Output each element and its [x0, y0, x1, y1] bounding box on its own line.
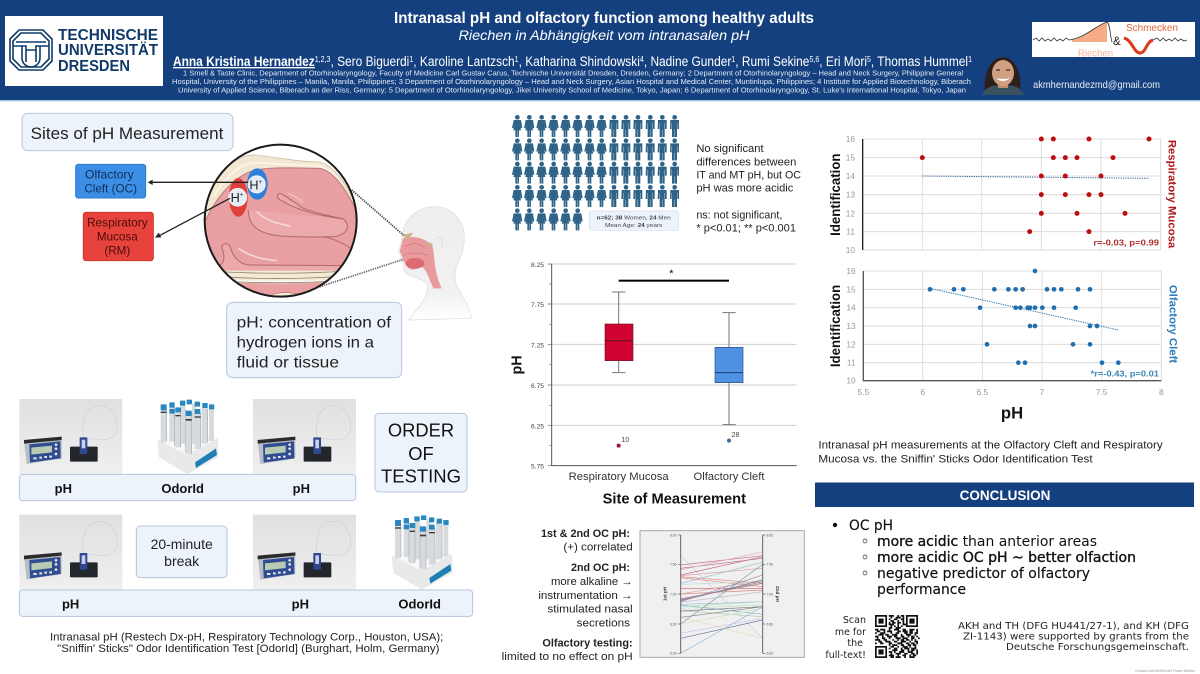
chart: olfactory cleft scatter [818, 266, 1178, 465]
conclusion bullets: more acidic than anterior areas [877, 534, 1097, 550]
authors: 1,2,3 [315, 55, 331, 64]
sequence bar 2: pH [292, 596, 309, 611]
email: akmhernandezmd@gmail.com [1033, 79, 1160, 91]
caption: scatter plots [818, 439, 1163, 465]
chart: olfactory cleft scatter: 6 [920, 387, 925, 397]
box: respiratory mucosa [605, 292, 633, 448]
significance bar [619, 268, 729, 282]
callout: order of testing: OF [408, 443, 434, 464]
text: scan me: full-text! [825, 650, 866, 661]
sequence bar 1: pH [293, 481, 310, 496]
chart: olfactory cleft scatter: Identification [828, 285, 843, 367]
chart: 1st vs 2nd OC pH slope graph: 7.00 [767, 592, 773, 596]
text: funding [958, 621, 1189, 653]
logo: Riechen & Schmecken: & [1113, 36, 1121, 48]
text: funding: AKH and TH (DFG HU441/27-1), and KH (DFG [958, 621, 1189, 632]
text: scan me: the [847, 638, 863, 649]
chart: pH box plot [510, 262, 797, 508]
axis labels: Olfactory Cleft [693, 471, 765, 483]
callout: 20-minute break: 20-minute [151, 536, 213, 552]
text: repeated pH notes: 2nd OC pH: [571, 562, 630, 574]
arrow: to respiratory mucosa label [155, 198, 230, 238]
authors: 1 [409, 55, 414, 64]
sequence bar 1: OdorId [161, 481, 204, 496]
axis labels: pH [510, 355, 526, 375]
caption: scatter plots: Intranasal pH measurements at the Olfactory Cleft and Respiratory [818, 439, 1163, 451]
conclusion bullets: more acidic OC pH ~ better olfaction [877, 550, 1136, 566]
text: pH differences: * p<0.01; ** p<0.001 [696, 222, 796, 234]
chart: olfactory cleft scatter: 6.5 [977, 387, 988, 397]
text: pH differences: differences between [696, 156, 796, 168]
caption: methods: "Sniffin' Sticks" Odor Identification Test [OdorId] (Burghart, Holm, Germany) [57, 643, 440, 655]
sequence bar 1 [19, 474, 356, 501]
affiliations: Hospital, University of the Philippines – Manila, Manila, Philippines; 3 Department of Otorhinolaryngology – Head and Neck Surgery, Asian Hospital and Medical Center, Muntinlupa, Philippines; 4 Institute for Applied Biotechnology, Biberach [172, 77, 971, 86]
callout: 20-minute break: break [164, 553, 200, 569]
text: repeated pH notes: more alkaline → [551, 576, 633, 588]
label: respiratory mucosa: Mucosa [97, 231, 138, 244]
affiliations: 1 Smell & Taste Clinic, Department of Otorhinolaryngology, Faculty of Medicine Carl Gustav Carus, Technische Universität Dresden, Dresden, Germany; 2 Department of Otorhinolaryngology – Head and Neck Surgery, Philippine General [183, 68, 963, 78]
y-axis ticks: 7.75 [531, 302, 544, 309]
label: olfactory cleft: Cleft (OC) [84, 183, 137, 196]
chart: respiratory mucosa scatter: 10 [846, 245, 855, 255]
text: repeated pH notes: (+) correlated [563, 542, 633, 554]
text: pH differences: ns: not significant, [696, 210, 782, 222]
icon: head profile [399, 207, 472, 320]
panel: conclusion [815, 482, 1196, 673]
chart: 1st vs 2nd OC pH slope graph: 2nd pH [775, 586, 780, 603]
authors: 1 [968, 55, 972, 64]
icon: pH meter 4 [253, 515, 356, 590]
axis labels: Respiratory Mucosa [569, 471, 669, 483]
marker: respiratory mucosa site: H [231, 191, 240, 205]
authors: , Katharina Shindowski [519, 54, 640, 69]
subtitle: Riechen in Abhängigkeit vom intranasalen pH [458, 27, 750, 43]
chart: olfactory cleft scatter: 16 [846, 266, 856, 276]
text: repeated pH notes: 1st & 2nd OC pH: [541, 528, 630, 540]
label: olfactory cleft [76, 164, 146, 198]
marker: olfactory cleft site [247, 168, 268, 200]
icon: odor kit 2 [392, 515, 452, 590]
text: pH differences: IT and MT pH, but OC [696, 170, 801, 182]
axis labels [510, 355, 765, 508]
chart: 1st vs 2nd OC pH slope graph [640, 531, 804, 657]
text: repeated pH notes: stimulated nasal [547, 604, 633, 616]
pictogram: 62 participants [512, 115, 679, 230]
arrow: to olfactory cleft label [148, 180, 248, 185]
label: olfactory cleft: Olfactory [85, 169, 134, 182]
chart: 1st vs 2nd OC pH slope graph: 7.50 [767, 563, 773, 567]
callout: pH definition: fluid or tissue [237, 354, 339, 371]
authors: , Rumi Sekine [735, 54, 809, 69]
chart: olfactory cleft scatter: 12 [846, 339, 856, 349]
chart: respiratory mucosa scatter: 12 [846, 208, 855, 218]
panel: sites of pH measurement [22, 113, 472, 378]
text: pH differences: No significant [696, 143, 764, 155]
chart: respiratory mucosa scatter: Identification [828, 153, 843, 236]
sequence bar 1: pH [55, 481, 72, 496]
icon: pH meter 1 [19, 399, 122, 474]
logo: Riechen & Schmecken [1032, 22, 1195, 60]
logo: Riechen & Schmecken: Riechen [1078, 48, 1113, 60]
callout: sample size [589, 211, 678, 230]
callout: sample size: n=62; 38 Women, 24 Men [597, 216, 671, 222]
authors: , Sero Biguerdi [330, 54, 409, 69]
chart: 1st vs 2nd OC pH slope graph: 1st pH [662, 586, 667, 601]
icon: pH meter 3 [19, 515, 122, 590]
panel: order of testing [19, 399, 473, 655]
caption: scatter plots: Mucosa vs. the Sniffin' Sticks Odor Identification Test [818, 453, 1093, 465]
chart: respiratory mucosa scatter: Respiratory Mucosa [1165, 140, 1177, 249]
sequence bar 2: OdorId [398, 596, 441, 611]
conclusion bullets: performance [877, 582, 966, 598]
dotted zoom connector lines [315, 190, 403, 288]
callout: order of testing: ORDER [388, 420, 454, 441]
chart: olfactory cleft scatter: 5.5 [858, 387, 869, 397]
conclusion bullets: negative predictor of olfactory [877, 566, 1090, 582]
logo: TU Dresden: DRESDEN [58, 58, 130, 75]
chart: 1st vs 2nd OC pH slope graph: 6.00 [670, 652, 677, 656]
chart: olfactory cleft scatter: 15 [846, 284, 856, 294]
heading: conclusion: CONCLUSION [960, 488, 1050, 503]
y-axis ticks: 8.25 [531, 262, 544, 269]
chart: respiratory mucosa scatter: 16 [846, 134, 855, 144]
label: respiratory mucosa: (RM) [104, 245, 130, 258]
chart: olfactory cleft scatter: pH [1001, 403, 1023, 422]
logo: Riechen & Schmecken: Schmecken [1126, 22, 1178, 34]
marker: olfactory cleft site: + [258, 180, 262, 186]
chart: olfactory cleft scatter: 14 [846, 303, 856, 313]
chart: respiratory mucosa scatter [828, 134, 1177, 255]
affiliations: University of Applied Science, Biberach an der Riss, Germany; 5 Department of Otorhinolaryngology, Jikei University School of Medicine, Tokyo, Japan; 6 Department of Otorhinolaryngology, St. Luke's International Hospital, Tokyo, Japan [178, 86, 966, 94]
text: repeated pH notes: secretions [577, 617, 630, 629]
authors: , Eri Mori [819, 54, 867, 69]
caption: methods [50, 631, 443, 655]
text: scan me: Scan [843, 615, 866, 626]
caption: methods: Intranasal pH (Restech Dx-pH, Respiratory Technology Corp., Houston, USA); [50, 631, 443, 643]
chart: respiratory mucosa scatter: 15 [846, 153, 855, 163]
chart: 1st vs 2nd OC pH slope graph: 6.00 [767, 652, 773, 656]
callout: order of testing [375, 413, 467, 492]
logo: TU Dresden: UNIVERSITÄT [58, 42, 159, 59]
sequence bar 2 [19, 590, 473, 616]
icon: odor kit 1 [157, 400, 218, 474]
text: credit: Created with BioRender Poster Builder [1135, 669, 1196, 673]
callout: pH definition: pH: concentration of [237, 314, 392, 331]
chart: olfactory cleft scatter: 13 [846, 321, 856, 331]
chart: olfactory cleft scatter: 10 [846, 376, 856, 386]
label: respiratory mucosa [83, 212, 153, 261]
authors: 1 [731, 55, 736, 64]
callout: sample size: Mean Age: 24 years [605, 223, 663, 229]
chart: 1st vs 2nd OC pH slope graph: 6.50 [670, 622, 677, 626]
authors: 5 [867, 55, 871, 64]
box: olfactory cleft: 28 [732, 432, 740, 439]
conclusion bullets: OC pH [849, 518, 893, 534]
text: scan me [825, 615, 866, 661]
QR code [875, 616, 920, 657]
chart: olfactory cleft scatter: 7 [1040, 387, 1045, 397]
y-axis ticks: 6.75 [531, 383, 544, 390]
icon: pH meter 2 [253, 399, 356, 474]
chart: olfactory cleft scatter: 7.5 [1096, 387, 1108, 397]
text: repeated pH notes [502, 528, 633, 663]
affiliations [172, 68, 971, 94]
title: Intranasal pH and olfactory function among healthy adults [394, 10, 814, 27]
chart: respiratory mucosa scatter: 13 [846, 190, 855, 200]
text: funding: Deutsche Forschungsgemeinschaft. [1006, 642, 1189, 653]
text: scan me: me for [835, 627, 866, 638]
heading: sites of pH measurement [22, 113, 233, 151]
author photo [982, 57, 1024, 95]
marker: olfactory cleft site: H [249, 178, 258, 192]
text: repeated pH notes: Olfactory testing: [542, 638, 633, 650]
heading: conclusion [815, 482, 1194, 507]
chart: 1st vs 2nd OC pH slope graph: 7.00 [670, 592, 677, 596]
marker: respiratory mucosa site [229, 178, 248, 217]
chart: 1st vs 2nd OC pH slope graph: 6.50 [767, 622, 773, 626]
text: pH differences [696, 143, 801, 234]
y-axis ticks: 5.75 [531, 464, 544, 471]
box: olfactory cleft [715, 313, 743, 443]
chart: olfactory cleft scatter: 8 [1159, 387, 1164, 397]
logo: TU Dresden [5, 16, 163, 86]
callout: 20-minute break [136, 526, 227, 578]
text: funding: ZI-1143) were supported by grants from the [963, 632, 1189, 642]
chart: respiratory mucosa scatter: 11 [846, 227, 855, 237]
axis labels: Site of Measurement [603, 492, 746, 508]
authors: 5,6 [809, 55, 820, 64]
text: repeated pH notes: limited to no effect on pH [502, 651, 633, 663]
authors: , Nadine Gunder [644, 54, 732, 69]
authors: 1 [515, 55, 519, 64]
conclusion bullets [833, 518, 1136, 598]
text: repeated pH notes: instrumentation → [538, 590, 633, 602]
header band [0, 0, 1200, 102]
significance bar: * [669, 268, 674, 280]
chart: 1st vs 2nd OC pH slope graph: 7.50 [670, 563, 677, 567]
authors: , Thomas Hummel [871, 54, 968, 69]
chart: 1st vs 2nd OC pH slope graph: 8.00 [767, 533, 773, 537]
authors: Anna Kristina Hernandez [173, 54, 315, 69]
y-axis ticks [531, 262, 544, 471]
label: respiratory mucosa: Respiratory [87, 217, 148, 230]
sequence bar 2: pH [62, 596, 79, 611]
chart: respiratory mucosa scatter: r=-0.03, p=0.99 [1093, 238, 1159, 248]
chart: olfactory cleft scatter: *r=-0.43, p=0.01 [1091, 369, 1159, 379]
logo: TU Dresden: TECHNISCHE [58, 27, 158, 44]
box: respiratory mucosa: 10 [621, 437, 629, 444]
illustration: nasal cavity lens [203, 145, 359, 300]
text: pH differences: pH was more acidic [696, 183, 794, 195]
marker: respiratory mucosa site: + [240, 193, 244, 199]
callout: pH definition: hydrogen ions in a [237, 334, 374, 351]
chart: olfactory cleft scatter: Olfactory Cleft [1166, 285, 1178, 363]
callout: pH definition [227, 302, 402, 378]
heading: sites of pH measurement: Sites of pH Measurement [31, 125, 224, 143]
y-axis ticks: 7.25 [531, 342, 544, 349]
y-axis ticks: 6.25 [531, 423, 544, 430]
chart: olfactory cleft scatter: 11 [847, 358, 856, 368]
chart: 1st vs 2nd OC pH slope graph: 8.00 [670, 533, 677, 537]
callout: order of testing: TESTING [381, 466, 461, 487]
authors: , Karoline Lantzsch [413, 54, 515, 69]
panel: participants [512, 115, 801, 234]
authors: 4 [640, 55, 644, 64]
chart: respiratory mucosa scatter: 14 [846, 171, 855, 181]
